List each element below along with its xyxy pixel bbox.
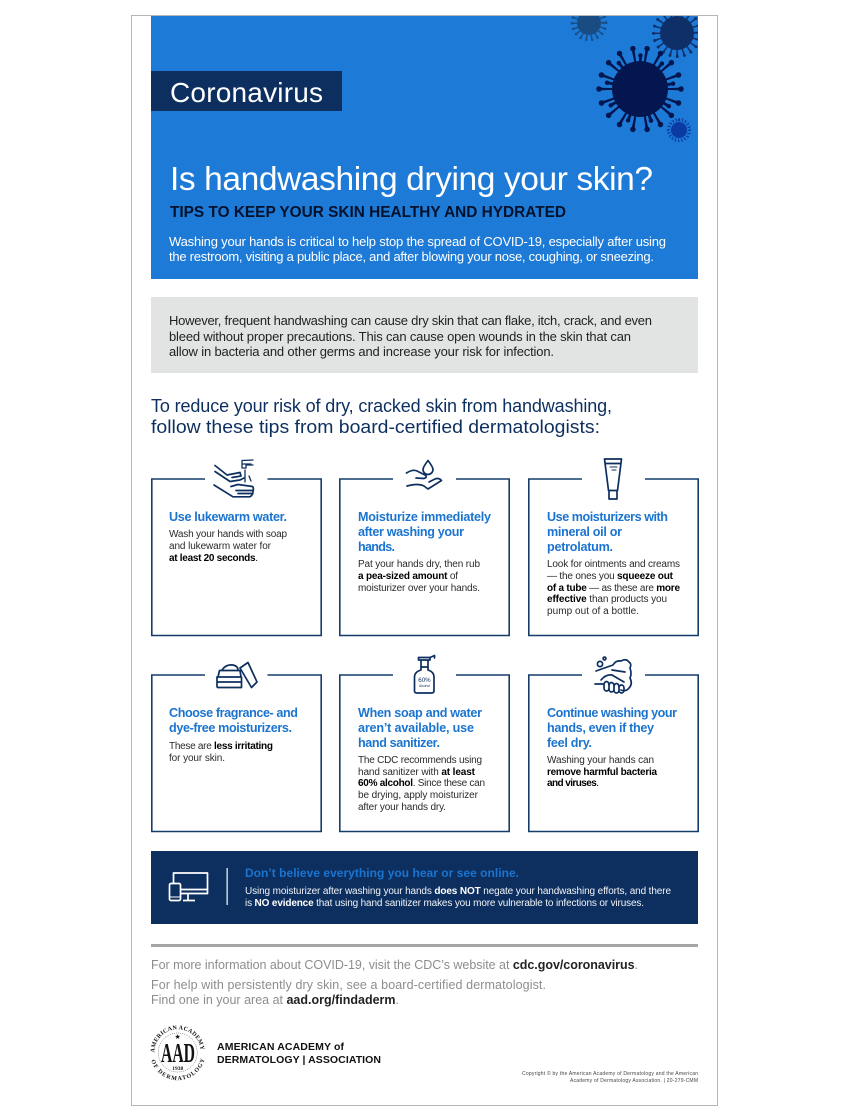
title: Is handwashing drying your skin?	[170, 161, 653, 198]
tip heading	[547, 706, 677, 750]
logo: AAD seal: AMERICAN ACADEMY	[150, 1025, 205, 1053]
footer links: Find one in your area at aad.org/findaderm.	[151, 993, 399, 1007]
logo: AAD seal: ★	[175, 1033, 181, 1041]
label: Coronavirus	[151, 71, 342, 111]
tip body: after your hands dry.	[358, 802, 446, 813]
tip heading: Continue washing your	[547, 706, 677, 720]
tip heading: mineral oil or	[547, 525, 622, 539]
tip heading: dye-free moisturizers.	[169, 721, 292, 735]
logo: AAD seal	[150, 1025, 205, 1080]
tip body: effective than products you	[547, 594, 667, 605]
panel: dry skin warning: allow in bacteria and other germs and increase your risk for infection.	[169, 344, 554, 359]
panel: mineral oil or petrolatum	[529, 459, 698, 636]
tip body: remove harmful bacteria	[547, 767, 657, 778]
intro text	[169, 234, 666, 264]
icon: coronavirus particles	[572, 6, 700, 142]
page frame	[132, 16, 718, 1106]
tip body: Washing your hands can	[547, 755, 654, 766]
banner body	[245, 886, 671, 909]
tip body: for your skin.	[169, 753, 225, 764]
tip body: and viruses.	[547, 778, 599, 789]
tip body	[547, 559, 680, 617]
logo: organisation name: DERMATOLOGY | ASSOCIATION	[217, 1054, 381, 1066]
icon: hands under faucet	[214, 460, 253, 497]
logo: organisation name: AMERICAN ACADEMY of	[217, 1041, 344, 1053]
panel: dry skin warning: bleed without proper precautions. This can cause open wounds in the skin that can	[169, 329, 631, 344]
tip body	[547, 755, 657, 789]
tip body	[358, 559, 480, 594]
tip heading: aren’t available, use	[358, 721, 474, 735]
tip body: pump out of a bottle.	[547, 606, 639, 617]
logo: AAD seal: AAD	[161, 1038, 195, 1068]
tip body: moisturizer over your hands.	[358, 583, 480, 594]
tip body: at least 20 seconds.	[169, 553, 258, 564]
tip heading	[358, 706, 482, 750]
tip heading	[169, 706, 298, 735]
panel: fragrance-free	[152, 662, 321, 832]
tip heading: hand sanitizer.	[358, 736, 440, 750]
tip body: Pat your hands dry, then rub	[358, 559, 480, 570]
label: 60% alcohol	[418, 677, 431, 688]
copyright	[522, 1070, 698, 1084]
tip heading: Choose fragrance- and	[169, 706, 298, 720]
tip heading: feel dry.	[547, 736, 592, 750]
panel: continue washing	[529, 657, 698, 832]
icon: soapy handshake	[595, 657, 631, 693]
intro text: the restroom, visiting a public place, and after blowing your nose, coughing, or sneezing.	[169, 249, 654, 264]
section heading	[151, 396, 612, 437]
panel: dry skin warning: However, frequent handwashing can cause dry skin that can flake, itch, crack, and even	[169, 313, 652, 328]
tip heading: Use lukewarm water.	[169, 510, 287, 524]
panel: moisturize immediately	[340, 460, 509, 636]
icon: monitor and phone	[170, 873, 208, 900]
footer links: For help with persistently dry skin, see a board-certified dermatologist.	[151, 978, 546, 992]
panel: dry skin warning	[151, 297, 698, 373]
banner heading: Don’t believe everything you hear or see online.	[245, 866, 519, 880]
label: 60% alcohol: 60%	[418, 677, 431, 684]
tip body	[358, 755, 485, 813]
tip heading: Use moisturizers with	[547, 510, 668, 524]
footer links	[151, 958, 638, 1007]
tip body: a pea-sized amount of	[358, 571, 458, 582]
tip body: of a tube — as these are more	[547, 583, 680, 594]
icon: cream jar	[217, 662, 257, 688]
tip heading	[358, 510, 491, 554]
tip body	[169, 529, 287, 564]
tip heading	[547, 510, 668, 554]
tip heading: hands, even if they	[547, 721, 654, 735]
tip body: Wash your hands with soap	[169, 529, 287, 540]
label: 60% alcohol: Alcohol	[419, 684, 430, 688]
panel: misinformation banner	[151, 851, 698, 924]
tip body: 60% alcohol. Since these can	[358, 778, 485, 789]
section heading: follow these tips from board-certified dermatologists:	[151, 416, 600, 437]
tip body: Look for ointments and creams	[547, 559, 680, 570]
section heading: To reduce your risk of dry, cracked skin from handwashing,	[151, 396, 612, 416]
label: Coronavirus: Coronavirus	[170, 77, 323, 108]
icon: tube	[604, 459, 622, 499]
tip heading: hands.	[358, 540, 395, 554]
panel: hand sanitizer	[340, 656, 509, 832]
footer rule	[151, 944, 698, 947]
tip heading: after washing your	[358, 525, 464, 539]
subtitle: TIPS TO KEEP YOUR SKIN HEALTHY AND HYDRATED	[170, 204, 566, 221]
icon: sanitizer bottle	[414, 656, 434, 693]
tip body: The CDC recommends using	[358, 755, 482, 766]
tip body: and lukewarm water for	[169, 541, 272, 552]
intro text: Washing your hands is critical to help stop the spread of COVID-19, especially after using	[169, 234, 666, 249]
icon: hand with drop	[406, 460, 442, 489]
divider	[226, 868, 228, 905]
banner body: is NO evidence that using hand sanitizer makes you more vulnerable to infections or viruses.	[245, 898, 644, 909]
footer links: For more information about COVID-19, visit the CDC’s website at cdc.gov/coronavirus.	[151, 958, 638, 972]
tip body: be drying, apply moisturizer	[358, 790, 479, 801]
tip heading: petrolatum.	[547, 540, 613, 554]
logo: AAD seal: 1938	[172, 1066, 183, 1072]
logo: AAD seal: OF DERMATOLOGY	[152, 1058, 204, 1080]
panel: lukewarm water	[152, 460, 321, 636]
tip body	[169, 741, 273, 764]
panel: blue header	[151, 6, 700, 279]
copyright: Academy of Dermatology Association. | 20-279-CMM	[570, 1078, 698, 1084]
tip body: These are less irritating	[169, 741, 273, 752]
tip heading: Moisturize immediately	[358, 510, 491, 524]
logo: organisation name	[217, 1041, 381, 1066]
tip body: — the ones you squeeze out	[547, 571, 674, 582]
tip heading: When soap and water	[358, 706, 482, 720]
banner body: Using moisturizer after washing your hands does NOT negate your handwashing efforts, and there	[245, 886, 671, 897]
tip body: hand sanitizer with at least	[358, 767, 476, 778]
copyright: Copyright © by the American Academy of Dermatology and the American	[522, 1070, 698, 1077]
